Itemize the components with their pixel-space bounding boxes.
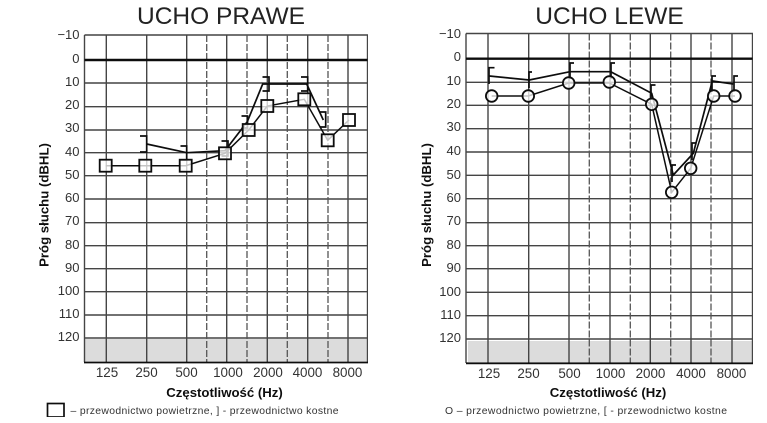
y axis labels: left ear: 60 xyxy=(447,190,461,205)
y axis labels: left ear: 80 xyxy=(447,237,461,252)
x axis title: left ear: Częstotliwość (Hz) xyxy=(550,385,666,400)
y axis labels: right ear xyxy=(57,27,80,344)
y axis labels: right ear: 100 xyxy=(58,283,80,298)
x axis labels: right ear: 250 xyxy=(135,365,158,380)
panel: right ear audiogram xyxy=(36,3,368,417)
grid: left ear xyxy=(466,34,753,363)
y axis labels: left ear: 100 xyxy=(439,284,461,299)
forbidden range shading xyxy=(468,341,752,362)
x axis labels: right ear: 1000 xyxy=(213,365,243,380)
y axis labels: right ear: 90 xyxy=(65,260,80,275)
y axis labels: left ear: 120 xyxy=(439,330,461,345)
x axis labels: right ear: 8000 xyxy=(333,365,362,380)
y axis labels: right ear: 40 xyxy=(65,144,80,159)
legend: right ear: – przewodnictwo powietrzne, ] - przewodnictwo kostne xyxy=(70,406,339,417)
y axis labels: right ear: 70 xyxy=(65,213,80,228)
y axis labels: right ear: 10 xyxy=(65,74,80,89)
y axis title: right ear: Próg słuchu (dBHL) xyxy=(36,143,52,267)
title: right ear: UCHO PRAWE xyxy=(137,3,305,30)
title: left ear: UCHO LEWE xyxy=(535,3,684,30)
y axis labels: right ear: 80 xyxy=(65,237,80,252)
y axis labels: right ear: 110 xyxy=(59,306,80,321)
y axis labels: left ear: 70 xyxy=(447,213,461,228)
y axis labels: left ear: 50 xyxy=(447,167,461,182)
y axis labels: left ear: −10 xyxy=(439,26,461,41)
x axis title: right ear: Częstotliwość (Hz) xyxy=(166,385,283,400)
x axis labels: left ear: 125 xyxy=(478,366,500,381)
y axis labels: left ear: 110 xyxy=(440,307,461,322)
x axis labels: right ear xyxy=(96,365,362,380)
y axis labels: left ear: 10 xyxy=(447,73,461,88)
y axis title: left ear: Próg słuchu (dBHL) xyxy=(419,143,434,267)
grid: right ear xyxy=(84,35,368,362)
bone conduction line: right ear xyxy=(140,77,326,160)
y axis labels: right ear: 30 xyxy=(65,120,80,135)
y axis labels: right ear: 120 xyxy=(58,329,80,344)
x axis labels: left ear: 2000 xyxy=(636,366,665,381)
y axis labels: left ear: 40 xyxy=(447,143,461,158)
y axis labels: left ear: 30 xyxy=(447,119,461,134)
bone conduction line: left ear xyxy=(489,63,738,182)
x axis labels: right ear: 125 xyxy=(96,365,118,380)
x axis labels: left ear: 8000 xyxy=(717,366,746,381)
y axis labels: right ear: −10 xyxy=(57,27,80,42)
y axis labels: right ear: 50 xyxy=(65,167,80,182)
legend: left ear: O – przewodnictwo powietrzne, [ - przewodnictwo kostne xyxy=(445,406,727,417)
y axis labels: left ear: 0 xyxy=(454,49,461,64)
x axis labels: right ear: 2000 xyxy=(253,365,283,380)
x axis labels: left ear: 4000 xyxy=(676,366,706,381)
y axis labels: right ear: 20 xyxy=(65,97,80,112)
x axis labels: right ear: 4000 xyxy=(293,365,322,380)
y axis labels: left ear: 20 xyxy=(447,96,461,111)
y axis labels: left ear xyxy=(439,26,461,345)
forbidden range shading xyxy=(85,339,367,362)
x axis labels: left ear: 250 xyxy=(517,366,540,381)
x axis labels: left ear: 1000 xyxy=(596,366,625,381)
x axis labels: left ear xyxy=(478,366,746,381)
x axis labels: right ear: 500 xyxy=(175,365,198,380)
air conduction line: right ear xyxy=(100,93,355,172)
y axis labels: right ear: 0 xyxy=(72,51,80,66)
air conduction line: left ear xyxy=(486,76,741,198)
panel: left ear audiogram xyxy=(419,3,753,417)
y axis labels: right ear: 60 xyxy=(65,190,80,205)
y axis labels: left ear: 90 xyxy=(447,260,461,275)
x axis labels: left ear: 500 xyxy=(558,366,581,381)
